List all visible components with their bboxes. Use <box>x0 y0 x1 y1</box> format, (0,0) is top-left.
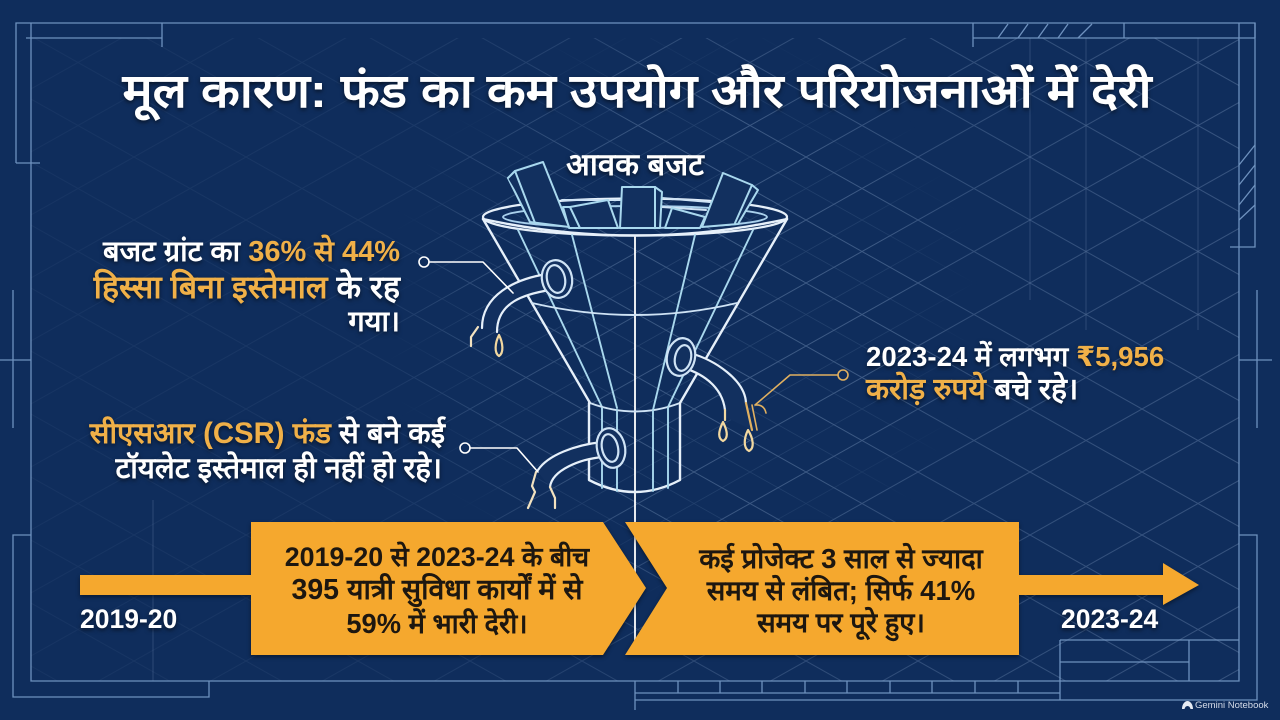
timeline end label: 2023-24 <box>1061 604 1158 634</box>
central vertical line <box>634 237 636 640</box>
callout text: remaining amount: करोड़ रुपये बचे रहे। <box>866 373 1078 406</box>
watermark: Gemini Notebook <box>1195 700 1268 711</box>
label: incoming budget: आवक बजट <box>566 147 704 182</box>
title: मूल कारण: फंड का कम उपयोग और परियोजनाओं में देरी <box>122 64 1152 117</box>
callout text: remaining amount: 2023-24 में लगभग ₹5,956 <box>866 341 1164 372</box>
pipe: neck leak <box>528 426 629 508</box>
callout text: CSR toilets: टॉयलेट इस्तेमाल ही नहीं हो रहे। <box>116 452 442 485</box>
timeline text: pending projects: समय पर पूरे हुए। <box>757 607 925 638</box>
timeline text: pending projects: समय से लंबित; सिर्फ 41% <box>707 575 975 606</box>
callout text: CSR toilets <box>88 416 448 486</box>
timeline text: delayed works: 2019-20 से 2023-24 के बीच <box>285 542 589 572</box>
timeline text: pending projects: कई प्रोजेक्ट 3 साल से ज्यादा <box>699 543 983 574</box>
callout leader: CSR <box>460 443 538 472</box>
timeline text: delayed works <box>285 542 590 639</box>
timeline text: delayed works: 59% में भारी देरी। <box>346 608 528 639</box>
callout leader: grant <box>419 257 513 293</box>
callout text: remaining amount <box>864 340 1165 409</box>
pipe: upper left leak <box>471 257 576 356</box>
callout text: unused grant <box>92 234 402 338</box>
callout text: unused grant: हिस्सा बिना इस्तेमाल के रह <box>94 269 400 305</box>
timeline text: delayed works: 395 यात्री सुविधा कार्यों में से <box>291 574 583 606</box>
callout text: CSR toilets: सीएसआर (CSR) फंड से बने कई <box>90 417 445 450</box>
callout leader: remaining amount <box>752 370 848 430</box>
arrow segment 2019-20 <box>80 522 646 655</box>
arrow segment 2023-24 <box>625 522 1199 655</box>
funnel body <box>483 198 787 492</box>
timeline start label: 2019-20 <box>80 604 177 634</box>
callout text: unused grant: बजट ग्रांट का 36% से 44% <box>103 236 400 268</box>
callout text: unused grant: गया। <box>348 306 400 338</box>
pipe: right leak <box>663 336 753 451</box>
budget blocks <box>508 162 758 228</box>
funnel rim front <box>483 219 787 236</box>
timeline text: pending projects <box>698 542 984 642</box>
